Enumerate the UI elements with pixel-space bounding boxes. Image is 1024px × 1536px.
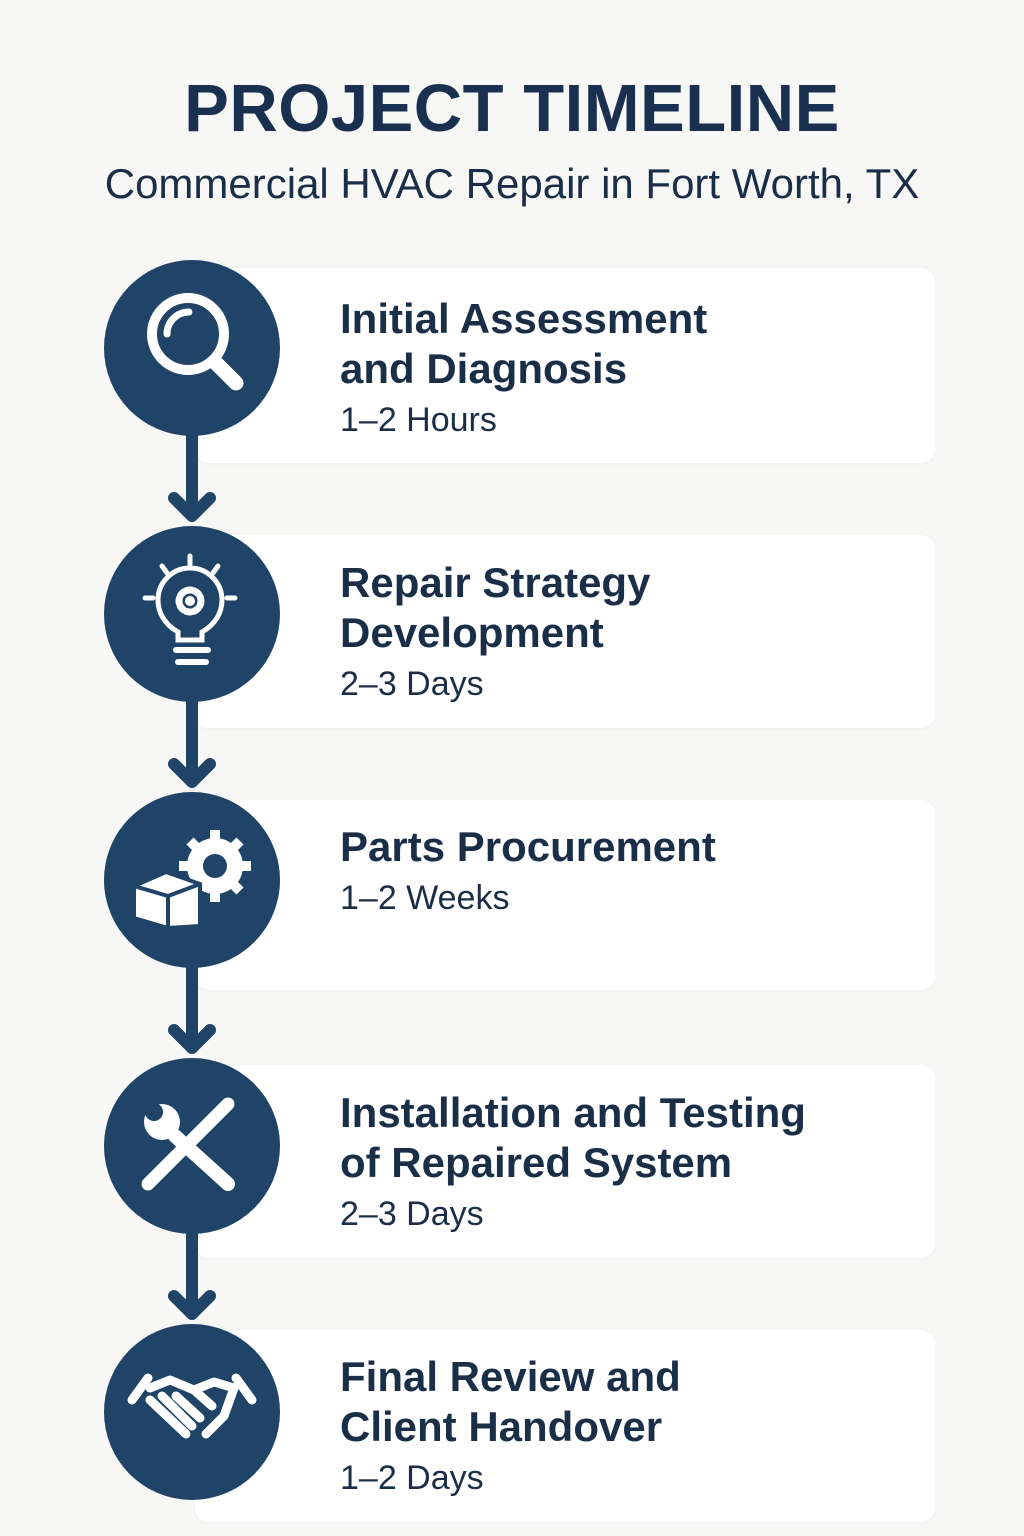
step 4 text: of Repaired System	[340, 1139, 732, 1186]
subtitle: Commercial HVAC Repair in Fort Worth, TX	[105, 160, 919, 207]
icon: wrench and screwdriver	[144, 1103, 228, 1184]
step 3 text: 1–2 Weeks	[340, 879, 509, 917]
step 1 text: and Diagnosis	[340, 345, 627, 392]
step 3 text	[340, 823, 716, 917]
step 2 text	[340, 559, 650, 703]
card 5	[195, 1330, 935, 1522]
step 2 text: Development	[340, 609, 604, 656]
step 4 text	[340, 1089, 806, 1233]
step 3 text: Parts Procurement	[340, 823, 716, 870]
step 1 text: Initial Assessment	[340, 295, 707, 342]
step 1 text	[340, 295, 707, 439]
card 3	[195, 800, 935, 990]
step 5 text	[340, 1353, 681, 1497]
card 4	[195, 1065, 935, 1258]
icon: lightbulb	[145, 556, 235, 662]
step 5 text: 1–2 Days	[340, 1459, 484, 1497]
step 5 text: Final Review and	[340, 1353, 681, 1400]
step 5 text: Client Handover	[340, 1403, 662, 1450]
card 1	[195, 268, 935, 463]
arrows	[174, 430, 210, 1314]
circles	[104, 260, 280, 1500]
card 2	[195, 535, 935, 728]
step 1 text: 1–2 Hours	[340, 401, 497, 439]
icon: box and gear	[134, 830, 251, 928]
step 2 text: Repair Strategy	[340, 559, 650, 606]
icon: magnifier	[152, 298, 236, 383]
step 4 text: Installation and Testing	[340, 1089, 806, 1136]
icon: handshake	[132, 1378, 252, 1434]
step 4 text: 2–3 Days	[340, 1195, 484, 1233]
title: PROJECT TIMELINE	[184, 71, 840, 146]
step 2 text: 2–3 Days	[340, 665, 484, 703]
